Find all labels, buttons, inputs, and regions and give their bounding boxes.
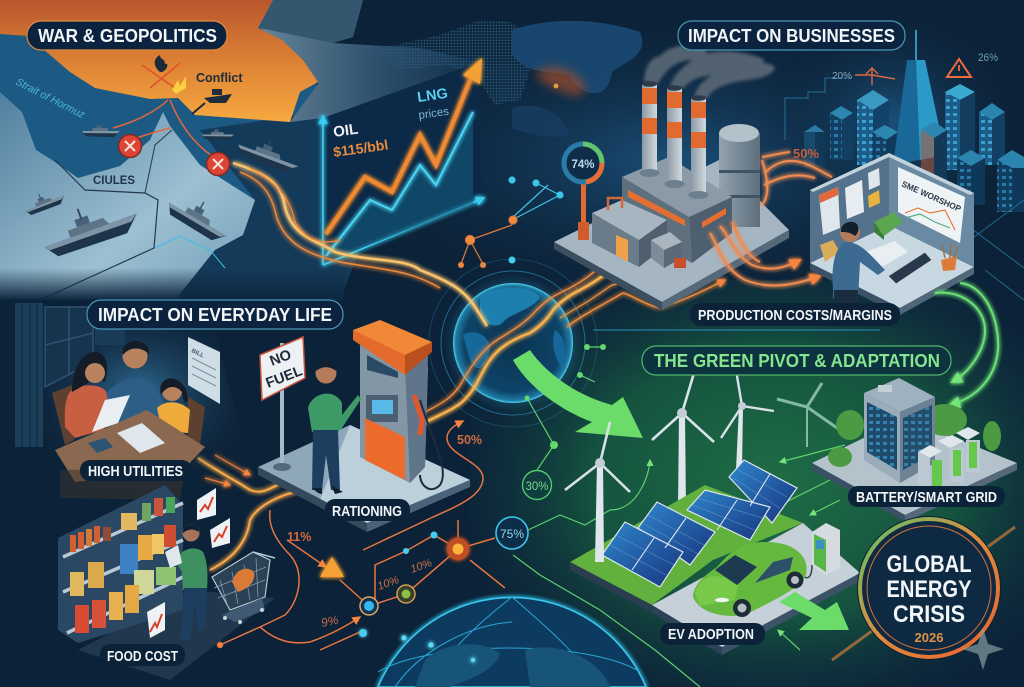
family reading bills (52, 337, 220, 500)
factory (554, 81, 789, 310)
thin orange network lines (218, 421, 505, 650)
warships (21, 121, 304, 261)
icon: blocked route marker 2 (206, 152, 230, 176)
chart axes (323, 116, 484, 265)
label: Production Costs / Margins: PRODUCTION COSTS/MARGINS (698, 308, 892, 324)
flow: Hormuz to globe (233, 163, 487, 326)
cash stack (874, 212, 903, 236)
skyline label: 20%: 20% (832, 70, 852, 82)
price tags (147, 488, 230, 638)
curved green arrows from business (935, 283, 998, 405)
monitor title: SME WORSHOP (900, 179, 963, 214)
shopping cart (212, 552, 275, 624)
SME workshop cubicle (810, 153, 974, 315)
floor (78, 590, 275, 680)
bill on wall (188, 337, 220, 404)
thin green connectors (513, 344, 845, 687)
label: Food Cost (100, 644, 185, 666)
badge year: 2026 (915, 630, 943, 645)
vertical data line (508, 225, 516, 600)
no fuel sign (260, 337, 305, 471)
node: green (397, 585, 415, 603)
label: 11%: 11% (287, 530, 311, 544)
icon: crossed flame (142, 55, 186, 94)
label: 9%: 9% (320, 613, 340, 630)
northern land (260, 0, 480, 122)
land: Iran orange (0, 0, 318, 122)
heading: War and Geopolitics (27, 21, 227, 50)
lower globe (360, 597, 646, 687)
no fuel sign: FUEL (264, 363, 305, 392)
chart text: OIL: OIL (332, 121, 359, 141)
flow: utilities to pump (198, 458, 280, 492)
upper network nodes (458, 177, 563, 268)
icon: warning (947, 59, 971, 77)
nodes: cyan (359, 532, 438, 637)
child (157, 378, 190, 433)
shelf unit (58, 485, 183, 643)
EV charger (800, 523, 840, 578)
heading: Impact on Everyday Life (87, 300, 343, 329)
flows: factory to office (710, 152, 832, 286)
map label: CIULES: CIULES (93, 173, 135, 187)
badge title: CRISIS: CRISIS (893, 601, 965, 628)
renewable platform (570, 485, 860, 655)
platform (258, 425, 470, 523)
world map backdrop (372, 20, 642, 137)
calendars and notes (819, 187, 840, 235)
main block (622, 157, 732, 217)
big green arrow (513, 350, 643, 438)
wind turbine foreground (565, 422, 630, 562)
label: 10% right: 10% (409, 557, 434, 576)
label: Rationing (325, 499, 410, 521)
tank (719, 124, 760, 227)
paper held by mother (92, 395, 130, 432)
icon: conflict ship (192, 89, 232, 114)
green arrow to badge (779, 592, 849, 630)
icon: up arrow (855, 68, 895, 85)
map sea (0, 0, 390, 300)
heading: Impact on Businesses: IMPACT ON BUSINESSES (688, 26, 895, 46)
label: 75% circle: 75% (500, 527, 524, 541)
worker (832, 222, 885, 312)
chart backing (323, 62, 482, 265)
monitor (898, 167, 965, 243)
wind turbine: faded (777, 383, 840, 447)
annex (592, 200, 667, 240)
smoke (644, 44, 775, 98)
icon: blocked route marker 1 (118, 134, 142, 158)
products (70, 497, 176, 633)
heading: The Green Pivot and Adaptation (642, 346, 951, 375)
gauge value: 74% (571, 159, 595, 171)
label: High Utilities: HIGH UTILITIES (88, 464, 183, 480)
father (105, 341, 165, 425)
room (15, 303, 250, 482)
bill on wall: BILL (190, 348, 205, 360)
rationing man (308, 361, 361, 494)
documents (866, 241, 908, 268)
heading: Impact on Businesses (678, 21, 905, 50)
oil price line (326, 58, 482, 234)
chairs (52, 385, 74, 445)
no fuel sign: NO (268, 347, 294, 370)
table (55, 410, 205, 482)
panel: green pivot (513, 283, 1017, 687)
wind turbine tall (652, 373, 714, 510)
label: 75% circle (496, 517, 528, 549)
battery racks (918, 427, 980, 490)
electric car (693, 542, 807, 617)
badge: global energy crisis (832, 517, 1015, 670)
label: EV Adoption (660, 623, 765, 645)
chart text: oil price: $115/bbl (332, 136, 389, 160)
heading: The Green Pivot and Adaptation: THE GREEN PIVOT & ADAPTATION (654, 351, 940, 371)
heading: War and Geopolitics: WAR & GEOPOLITICS (38, 26, 217, 46)
calculator (888, 252, 932, 284)
label: Rationing: RATIONING (332, 504, 402, 520)
grocery scene (58, 485, 275, 680)
map label: Conflict: Conflict (196, 71, 243, 85)
label: Battery / Smart Grid (848, 486, 1005, 507)
node: orange (447, 538, 469, 560)
papers on table (117, 423, 165, 453)
shopper (165, 524, 208, 640)
heading: Impact on Everyday Life: IMPACT ON EVERYDAY LIFE (98, 305, 332, 325)
panel: impact on businesses (554, 30, 1024, 315)
shipping route lines (113, 100, 215, 158)
globe (429, 259, 597, 427)
label: Food Cost: FOOD COST (107, 649, 178, 665)
node: blue (360, 597, 378, 615)
map label: Strait of Hormuz: Strait of Hormuz (14, 76, 87, 121)
skyline label: 26%: 26% (978, 52, 998, 64)
label: 50%: 50% (457, 433, 482, 447)
pump station (258, 320, 470, 532)
badge title: GLOBAL: GLOBAL (886, 551, 972, 578)
pump orange panel (365, 418, 405, 480)
green building (812, 378, 1017, 522)
label: 50%: 50% (793, 146, 819, 161)
LNG area (326, 112, 473, 262)
label: 10% left: 10% (376, 574, 401, 593)
chimneys (640, 81, 708, 199)
badge sparkle (962, 628, 1004, 670)
pump canopy (353, 320, 432, 365)
chart text: LNG: LNG (416, 86, 449, 106)
wind turbine right (721, 370, 774, 470)
gauge (564, 144, 602, 240)
flow arrows: energy flows through the globe (198, 163, 725, 570)
flow: food to pump (210, 490, 302, 570)
pump body (360, 345, 428, 483)
horizontal data line (593, 329, 880, 331)
panel: oil and LNG chart (323, 58, 484, 265)
panel: war and geopolitics map (0, 0, 480, 300)
label: 30% circle (522, 470, 552, 500)
trees (828, 404, 1001, 467)
land: Arabian peninsula (0, 92, 255, 300)
label: Battery / Smart Grid: BATTERY/SMART GRID (856, 490, 997, 506)
panel: everyday life (15, 303, 470, 680)
badge title: ENERGY: ENERGY (886, 576, 972, 603)
label: 30% circle: 30% (525, 481, 549, 493)
nozzle and hose (414, 395, 422, 435)
skyline (785, 30, 1024, 300)
label: High Utilities (80, 460, 192, 481)
pencil cup (941, 256, 957, 271)
solar arrays (602, 460, 797, 587)
network nodes and percentages (287, 433, 552, 637)
icon: warning triangle (320, 557, 344, 577)
mother (65, 352, 108, 438)
pump screen (366, 395, 398, 422)
label: EV Adoption: EV ADOPTION (668, 627, 754, 643)
label: Production Costs / Margins (690, 303, 900, 326)
flow: everyday life to globe and business (420, 258, 624, 425)
chart text: prices: prices (418, 106, 450, 122)
